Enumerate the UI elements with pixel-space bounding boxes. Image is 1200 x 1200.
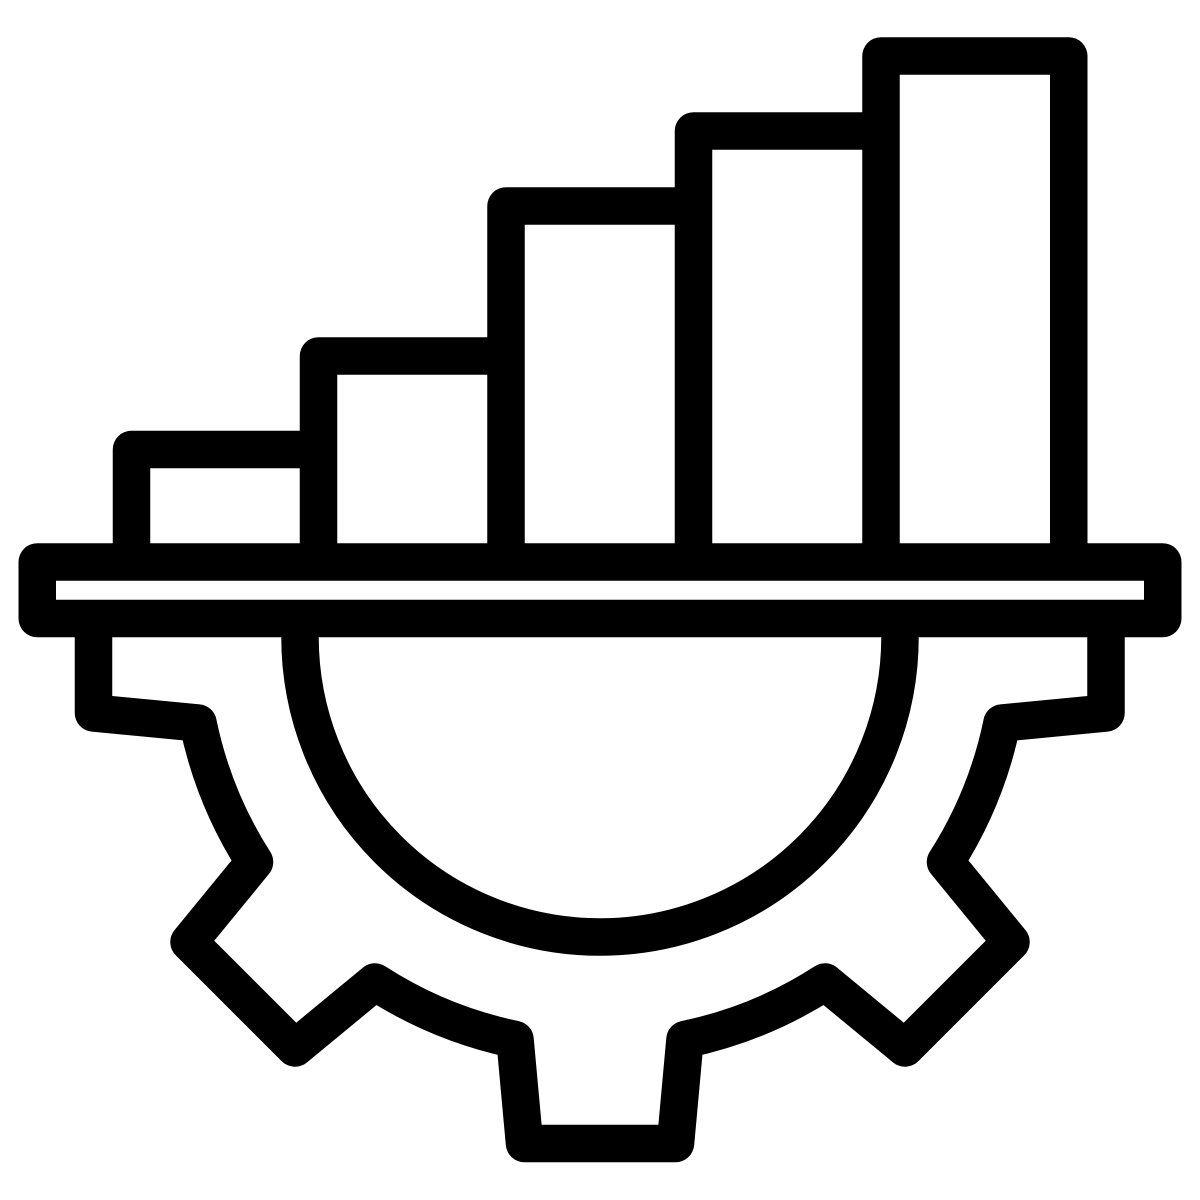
bar 5 [881,56,1069,562]
bar 2 [318,356,506,562]
inner semicircle [300,618,900,937]
bar 4 [694,131,881,562]
bar 3 [506,206,694,562]
gear half-outline [94,618,1106,1144]
shelf [37,562,1163,618]
bar 1 [132,450,318,562]
